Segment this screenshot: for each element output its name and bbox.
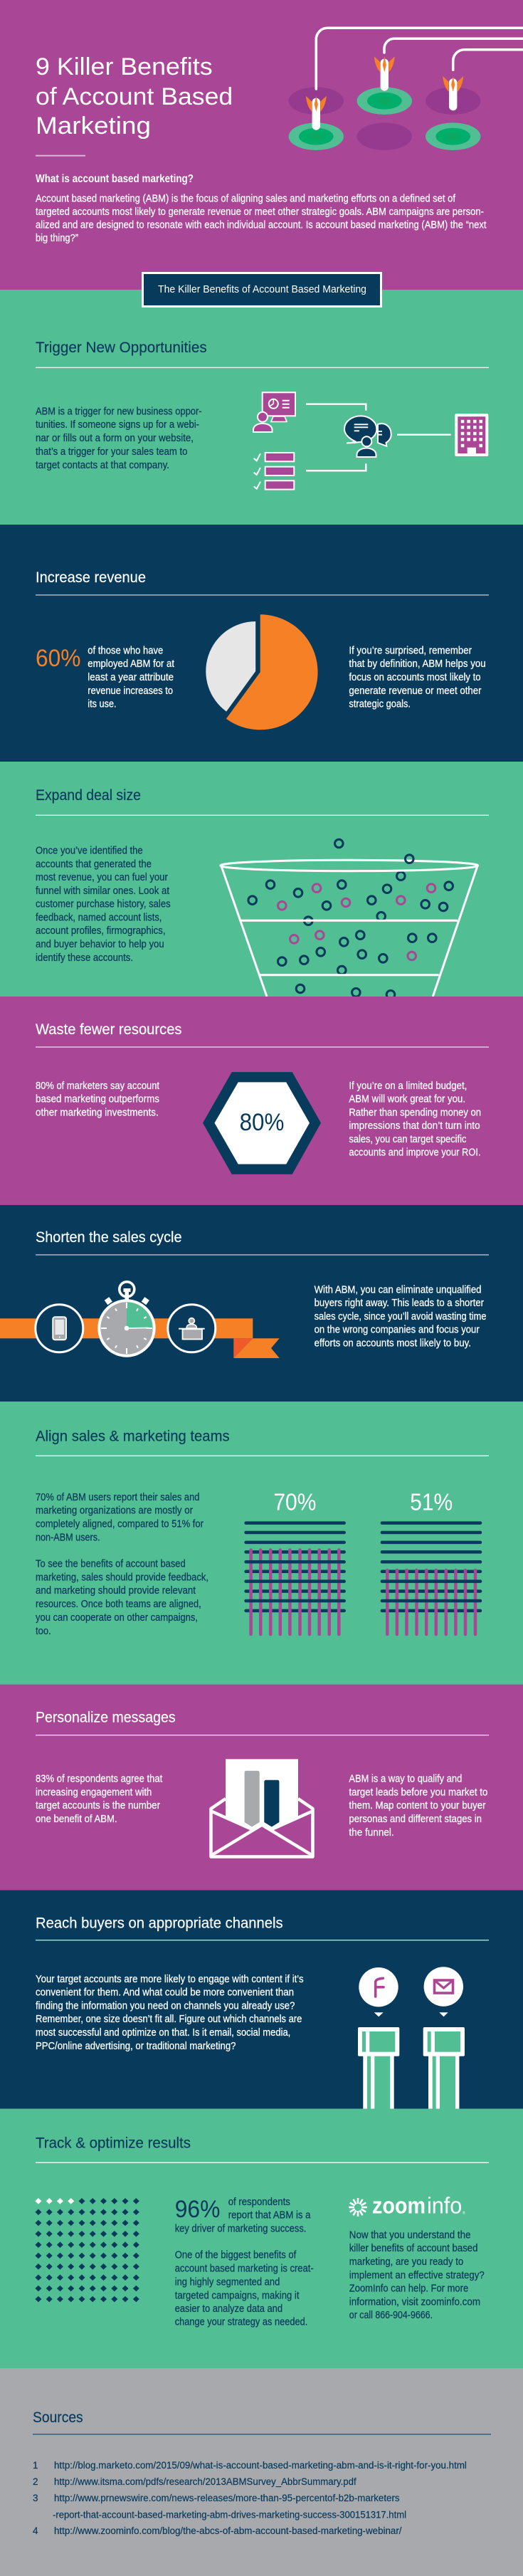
body text: sales cycle, since you’ll avoid wasting time [315,1311,487,1323]
logo: zoominfo [349,2192,465,2218]
panel: track and optimize results [0,2108,523,2368]
chart: 51 percent woven lines: 51% [410,1489,453,1515]
body text right: personas and different stages in [349,1814,482,1825]
body text middle: key driver of marketing success. [175,2224,306,2235]
stat: 96%: 96% [175,2196,220,2223]
source list: -report-that-account-based-marketing-abm-drives-marketing-success-300151317.html [53,2509,406,2520]
title [36,53,233,140]
panel: trigger new opportunities [0,290,523,525]
body text: marketing organizations are mostly or [36,1505,193,1516]
body text right [349,1774,487,1839]
body text: you can cooperate on other campaigns, [36,1612,198,1624]
body text middle: report that ABM is a [228,2210,311,2222]
source list: http://www.itsma.com/pdfs/research/2013ABMSurvey_AbbrSummary.pdf [54,2476,356,2487]
source list: 4 [33,2525,38,2536]
body text right: the funnel. [349,1827,394,1839]
icon: smartphone [36,1305,83,1352]
icon: email channel pipe [423,1967,465,2108]
body text [36,1492,208,1637]
body text: non-ABM users. [36,1532,100,1543]
intro paragraph: targeted accounts most likely to generate revenue or meet other strategic goals. ABM campaigns are person- [36,206,484,218]
body text: convenient for them. And what could be more convenient than [36,1987,294,1999]
body text right: ZoomInfo can help. For more [349,2283,468,2295]
heading: Waste fewer resources [36,1021,182,1038]
body text: feedback, named account lists, [36,913,162,924]
body text: most successful and optimize on that. Is it email, social media, [36,2027,290,2039]
body text: tunities. If someone signs up for a webi- [36,419,199,431]
intro paragraph: Account based marketing (ABM) is the focus of aligning sales and marketing efforts on a defined set of [36,194,456,205]
body text right: killer benefits of account based [349,2243,477,2254]
body text right: Now that you understand the [349,2229,471,2241]
logo: zoominfo: ® [463,2211,465,2215]
icon: person at desk [168,1305,216,1352]
source list: 2 [33,2476,38,2487]
stat: 60%: 60% [36,645,81,672]
body text: Once you’ve identified the [36,846,143,857]
logo: zoominfo: info [427,2192,462,2218]
body text middle: One of the biggest benefits of [175,2250,297,2261]
icon: envelope with bar chart [211,1759,313,1856]
icon: webinar presenter [253,392,295,432]
body text right: target leads before you market to [349,1787,487,1798]
body text: customer purchase history, sales [36,899,171,910]
body text: ABM is a trigger for new business oppor- [36,406,202,418]
heading: Track & optimize results [36,2135,191,2151]
heading: Sources [33,2409,83,2426]
body text right [349,1081,481,1159]
body text left: one benefit of ABM. [36,1814,117,1825]
source list [33,2460,467,2536]
body text left: 80% of marketers say account [36,1081,159,1092]
panel: shorten the sales cycle [0,1205,523,1402]
title: Marketing [36,112,151,140]
body text left: other marketing investments. [36,1107,159,1118]
section banner [142,273,381,306]
body text [36,406,202,471]
body text middle: easier to analyze data and [175,2303,282,2315]
heading: Trigger New Opportunities [36,340,207,356]
intro paragraph [36,194,487,244]
body text: accounts that generated the [36,858,152,870]
body text: that by definition, ABM helps you [349,658,486,670]
body text right: ABM is a way to qualify and [349,1774,462,1785]
section banner: The Killer Benefits of Account Based Marketing [158,283,366,295]
body text: marketing, sales should provide feedback, [36,1572,208,1583]
body text middle: targeted campaigns, making it [175,2290,299,2301]
body text: finding the information you need on channels you already use? [36,2000,295,2012]
title: of Account Based [36,83,233,110]
stat description: its use. [88,699,117,710]
pie chart: 60 percent [206,614,318,730]
body text: strategic goals. [349,699,411,710]
body text right: them. Map content to your buyer [349,1800,486,1812]
chart: 70 percent woven lines [246,1489,344,1634]
body text [349,646,486,710]
logo: zoominfo: zoom [372,2192,426,2218]
body text middle: account based marketing is creat- [175,2264,314,2275]
body text: and buyer behavior to help you [36,939,164,950]
body text: resources. Once both teams are aligned, [36,1599,201,1610]
icon: office building [456,415,487,455]
body text: funnel with similar ones. Look at [36,885,169,897]
diamond grid: 96 of 100 [35,2198,139,2302]
heading: Personalize messages [36,1710,176,1726]
illustration: darts and targets [289,28,523,150]
panel: reach buyers on appropriate channels [0,1891,523,2108]
panel: expand deal size [0,762,523,999]
title: 9 Killer Benefits [36,53,213,80]
stat description: least a year attribute [88,672,174,683]
body text left: based marketing outperforms [36,1094,159,1105]
body text: If you’re surprised, remember [349,646,472,657]
body text: With ABM, you can eliminate unqualified [315,1284,481,1295]
body text right: If you’re on a limited budget, [349,1081,467,1092]
body text: on the wrong companies and focus your [315,1325,480,1336]
source list: http://www.prnewswire.com/news-releases/more-than-95-percentof-b2b-marketers [54,2493,400,2503]
icon: checklist [254,453,294,490]
body text: To see the benefits of account based [36,1559,186,1570]
panel: waste fewer resources [0,997,523,1205]
body text: identify these accounts. [36,952,133,964]
body text middle [175,2197,314,2328]
body text: and marketing should provide relevant [36,1585,196,1597]
intro paragraph: big thing?” [36,233,78,244]
heading: Shorten the sales cycle [36,1229,182,1246]
body text: Remember, one size doesn’t fit all. Figure out which channels are [36,2014,302,2025]
body text [315,1284,487,1349]
body text: focus on accounts most likely to [349,672,481,683]
body text right: Rather than spending money on [349,1107,481,1118]
body text: Your target accounts are more likely to engage with content if it’s [36,1974,304,1985]
heading: Expand deal size [36,787,141,804]
icon: stopwatch [99,1282,154,1356]
intro paragraph: alized and are designed to resonate with each individual account. Is account based marketing (ABM) the “next [36,220,487,231]
diagram: triggers to sales conversation to company [253,392,487,490]
body text left: 83% of respondents agree that [36,1774,162,1785]
body text right: ABM will work great for you. [349,1094,465,1105]
body text right: implement an effective strategy? [349,2270,485,2281]
body text: 70% of ABM users report their sales and [36,1492,199,1503]
body text right: accounts and improve your ROI. [349,1147,481,1159]
icon: orange ribbon [0,1318,280,1358]
body text left: increasing engagement with [36,1787,152,1798]
body text: generate revenue or meet other [349,685,482,697]
hexagon stat: 80% [203,1072,321,1174]
heading: Align sales & marketing teams [36,1428,230,1445]
body text: efforts on accounts most likely to buy. [315,1337,471,1349]
body text middle: change your strategy as needed. [175,2317,307,2328]
body text: that’s a trigger for your sales team to [36,446,188,458]
source list: 3 [33,2493,38,2503]
body text: completely aligned, compared to 51% for [36,1519,204,1530]
icon: conversation [344,416,391,457]
stat description [88,646,174,710]
chart: 51 percent woven lines [382,1489,480,1634]
source list: http://blog.marketo.com/2015/09/what-is-account-based-marketing-abm-and-is-it-right-for-you.html [54,2460,467,2471]
body text: account profiles, firmographics, [36,925,165,937]
body text right: impressions that don’t turn into [349,1120,480,1132]
panel: personalize messages [0,1684,523,1891]
body text right: information, visit zoominfo.com [349,2296,480,2308]
body text left [36,1774,162,1825]
body text: most revenue, you can fuel your [36,872,168,883]
body text: PPC/online advertising, or traditional marketing? [36,2041,236,2052]
heading: Increase revenue [36,569,146,586]
body text: target contacts at that company. [36,460,169,471]
body text right: marketing, are you ready to [349,2256,463,2268]
hexagon stat: 80%: 80% [240,1109,284,1136]
body text middle: ing highly segmented and [175,2276,280,2288]
panel: align sales and marketing teams [0,1402,523,1684]
stat description: of those who have [88,646,163,657]
body text [36,1974,304,2052]
funnel illustration [221,839,478,999]
body text right [349,2229,485,2321]
body text middle: of respondents [228,2197,290,2208]
body text left: target accounts is the number [36,1800,160,1812]
ribbon with stopwatch illustration [0,1282,280,1358]
body text: too. [36,1626,51,1637]
stat description: revenue increases to [88,685,173,697]
panel: hero introduction [0,0,523,290]
body text: buyers right away. This leads to a shorter [315,1298,484,1309]
body text: nar or fills out a form on your website, [36,433,194,444]
icon: facebook channel pipe [358,1967,399,2108]
chart: 70 percent woven lines: 70% [273,1489,316,1515]
panel: increase revenue [0,525,523,762]
body text [36,846,171,964]
body text left [36,1081,159,1118]
stat description: employed ABM for at [88,658,174,670]
source list: http://www.zoominfo.com/blog/the-abcs-of-abm-account-based-marketing-webinar/ [54,2525,402,2536]
body text right: sales, you can target specific [349,1134,466,1145]
body text right: or call 866-904-9666. [349,2310,433,2321]
heading: Reach buyers on appropriate channels [36,1915,283,1932]
source list: 1 [33,2460,38,2471]
panel: sources [0,2368,523,2576]
intro heading: What is account based marketing? [36,173,194,185]
